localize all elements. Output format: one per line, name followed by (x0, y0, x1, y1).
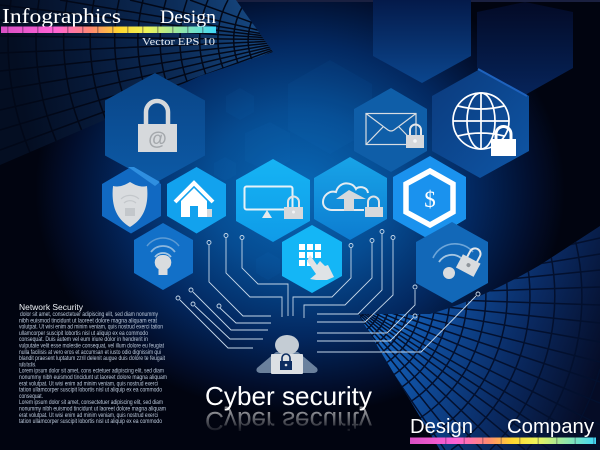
hexagon: dollar badge: $ (424, 187, 436, 212)
hexagon: house (167, 167, 226, 234)
subtitle: Vector EPS 10: Vector EPS 10 (142, 36, 216, 48)
heading reflection: Cyber security (205, 406, 372, 436)
text block: Network Security: nulla facilisis at vero eros et accumsan et iusto odio dignissim qui (19, 349, 161, 356)
hexagon: keypad with hand (282, 225, 342, 293)
heading: Cyber security: Cyber security (205, 381, 372, 411)
text block: Network Security: ullamcorper suscipit lobortis nisl ut aliquip ex ea commodo (19, 330, 148, 337)
text block: Network Security: blandit praesent luptatum zzril delenit augue duis dolore te feugait (19, 355, 165, 362)
hexagon: globe with padlock (432, 69, 529, 178)
footer: Design Company: Design (410, 416, 473, 438)
text block: Network Security: volutpat. Ut wisi enim ad minim veniam, quis nostrud exerci tation (19, 324, 163, 331)
text block: Network Security: Lorem ipsum dolor sit amet, consectetuer adipiscing elit, sed diam (19, 399, 163, 406)
hexagon: at-sign padlock (105, 73, 205, 183)
top dark hexagons (373, 0, 573, 95)
icon: user with laptop padlock (256, 335, 318, 374)
rainbow bar: top (1, 26, 216, 33)
text block: Network Security: dolor sit amet, consectetuer adipiscing elit, sed diam nonummy (20, 311, 159, 318)
hexagon: wifi padlock (416, 222, 488, 303)
title: Infographics Design (2, 4, 217, 28)
text block: Network Security (19, 303, 167, 425)
text block: Network Security: tation ullamcorper suscipit lobortis nisl ut aliquip ex ea commodo (19, 418, 162, 425)
hexagon: cloud upload with padlock (314, 157, 387, 240)
text block: Network Security: tation ullamcorper suscipit lobortis nisl ut aliquip ex ea commodo (19, 387, 162, 394)
text block: Network Security: consequat. Duis autem vel eum iriure dolor in hendrerit in (19, 336, 148, 343)
text block: Network Security: nibh euismod tincidunt ut laoreet dolore magna aliquam erat (19, 317, 157, 324)
title: Infographics Design: Design (160, 7, 217, 28)
text block: Network Security: erat volutpat. Ut wisi enim ad minim veniam, quis nostrud exerci (19, 412, 158, 419)
text block: Network Security: nonummy nibh euismod tincidunt ut laoreet dolore magna aliquam (19, 374, 167, 381)
hexagon: wifi bulb (134, 223, 193, 290)
footer: Design Company (410, 416, 594, 438)
text block: Network Security: erat volutpat. Ut wisi enim ad minim veniam, quis nostrud exerci (19, 380, 158, 387)
text block: Network Security: consequat. (19, 393, 43, 400)
text block: Network Security: vulputate velit esse molestie consequat, vel illum dolore eu feugiat (19, 342, 164, 350)
background faint hexagons (214, 60, 372, 280)
rainbow bar: bottom (410, 438, 596, 444)
hexagon: shield (102, 167, 161, 234)
text block: Network Security: Lorem ipsum dolor sit amet, cons ectetuer adipiscing elit, sed diam (19, 368, 164, 375)
hexagon: envelope with padlock (354, 88, 427, 172)
text block: Network Security: nonummy nibh euismod tincidunt ut laoreet dolore magna aliquam (19, 406, 166, 412)
text block: Network Security: Network Security (19, 303, 83, 312)
circuit traces (176, 230, 480, 352)
grid: top left perspective (0, 0, 273, 165)
title: Infographics Design: Infographics (2, 4, 121, 28)
grid: bottom right perspective (358, 226, 600, 450)
hexagon: monitor with padlock (236, 159, 310, 242)
hexagon: dollar badge (393, 156, 466, 240)
hexagon: at-sign padlock: @ (148, 129, 167, 150)
text block: Network Security: nulla facilisi. (19, 361, 36, 368)
footer: Design Company: Company (507, 416, 594, 438)
